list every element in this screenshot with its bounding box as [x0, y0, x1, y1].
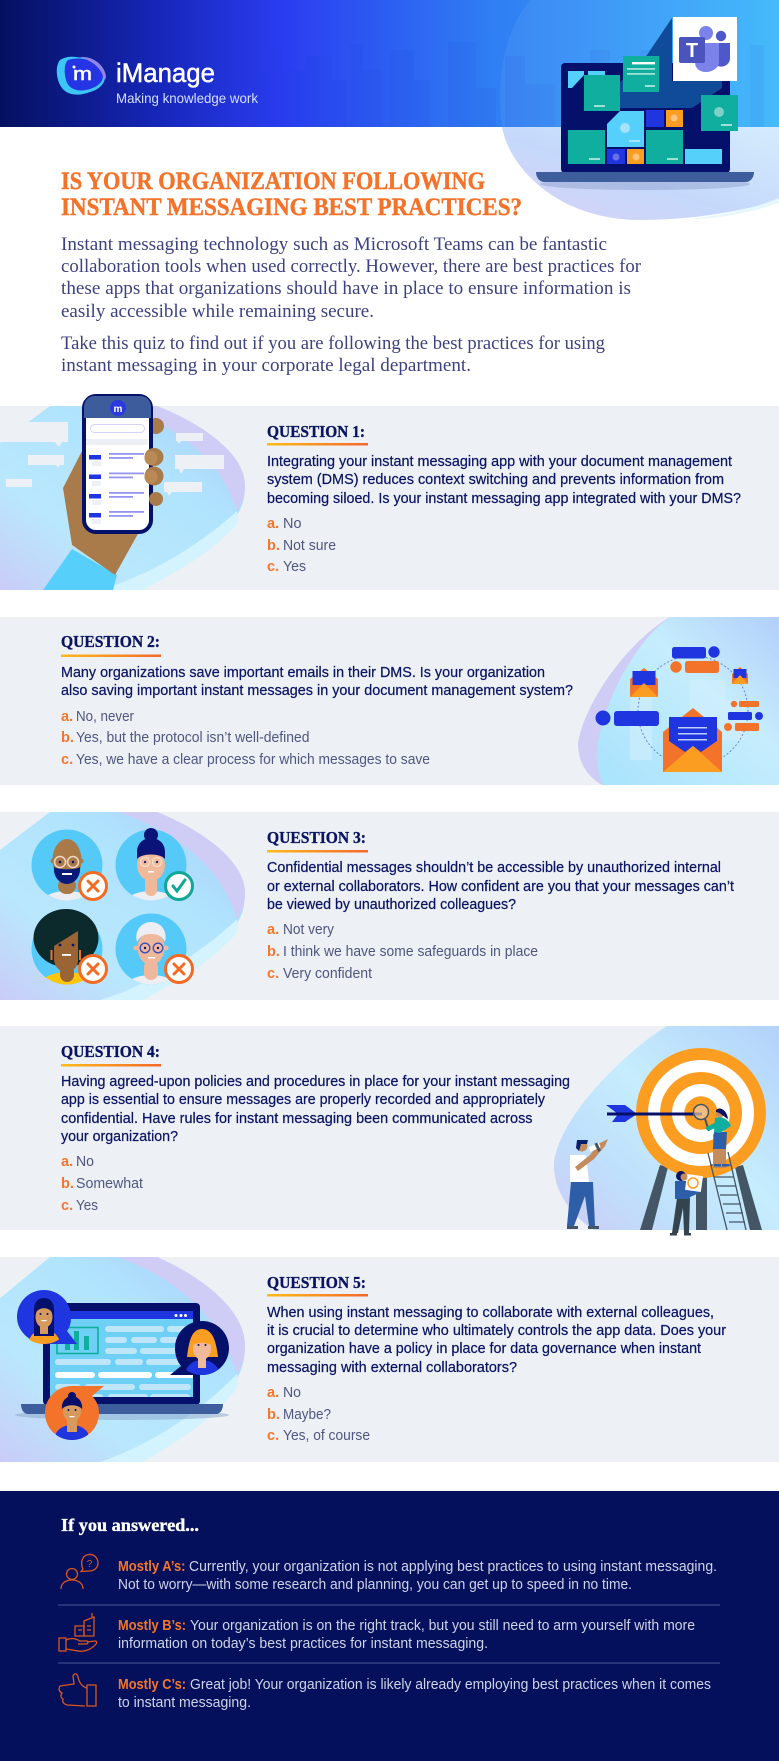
- intro text: [61, 234, 642, 376]
- answers: Yes, of course: [283, 1428, 370, 1444]
- answers: b.: [267, 1407, 280, 1423]
- answers: Yes, but the protocol isn’t well-defined: [76, 730, 310, 746]
- intro text: Take this quiz to find out if you are following the best practices for using: [61, 333, 605, 354]
- answers: a.: [267, 922, 279, 938]
- question text: [267, 1305, 726, 1376]
- answers: b.: [61, 1176, 74, 1192]
- question text: [61, 665, 573, 699]
- question text: Integrating your instant messaging app with your document management: [267, 454, 732, 470]
- woman with document: [670, 1171, 703, 1236]
- answers: No: [283, 516, 302, 532]
- result B: [118, 1618, 695, 1652]
- intro text: collaboration tools when used correctly. However, there are best practices for: [61, 256, 642, 277]
- question text: [267, 454, 741, 507]
- answers: b.: [61, 730, 74, 746]
- arrow: [606, 1105, 702, 1122]
- answers: c.: [61, 1198, 73, 1214]
- city skyline: [250, 42, 764, 127]
- icon: hand holding phone: m: [114, 404, 123, 415]
- wordmark: iManage: [116, 58, 215, 88]
- title: IS YOUR ORGANIZATION FOLLOWING: [61, 168, 485, 195]
- panel: question 1: [0, 396, 779, 590]
- avatars: [32, 828, 194, 984]
- avatar: woman with afro: [32, 909, 102, 984]
- answers: c.: [267, 559, 279, 575]
- answers: [61, 709, 430, 768]
- answers: No, never: [76, 709, 134, 725]
- header banner: [0, 0, 779, 127]
- answers: c.: [267, 966, 279, 982]
- icon: laptop with tiles and Teams logo: [536, 17, 754, 190]
- avatar: man on orange bubble: [45, 1386, 104, 1442]
- result B: Mostly B’s:: [118, 1618, 186, 1634]
- panel: question 3: [0, 812, 779, 1008]
- answers: Very confident: [283, 966, 372, 982]
- panel: question 5: [0, 1257, 779, 1462]
- chat bubbles: [0, 422, 224, 496]
- heading: QUESTION 4:: [61, 1042, 160, 1061]
- answers: a.: [61, 1154, 73, 1170]
- icon: person with question bubble: ?: [87, 1559, 93, 1570]
- blob: [578, 617, 779, 785]
- heading: QUESTION 1:: [267, 422, 365, 441]
- logo: iManage: [57, 57, 259, 106]
- header blob behind laptop: [500, 0, 779, 220]
- answers: No: [283, 1385, 301, 1401]
- result C: [118, 1677, 711, 1711]
- answers: b.: [267, 538, 280, 554]
- title: INSTANT MESSAGING BEST PRACTICES?: [61, 194, 522, 221]
- result A: [118, 1559, 717, 1593]
- question text: it is crucial to determine who ultimately controls the app data. Does your: [267, 1323, 726, 1339]
- question text: system (DMS) reduces context switching and prevents information from: [267, 472, 724, 488]
- answers: Not sure: [283, 538, 336, 554]
- avatar: older man: [116, 914, 186, 984]
- man with megaphone: [567, 1139, 608, 1229]
- intro text: instant messaging in your corporate legal department.: [61, 355, 471, 376]
- logo mark: [57, 57, 106, 95]
- icon: Microsoft Teams logo: [673, 17, 737, 81]
- result C: Great job! Your organization is likely already employing best practices when it comes: [190, 1677, 711, 1693]
- icon: Microsoft Teams logo: T: [686, 40, 698, 62]
- question text: be viewed by unauthorized colleagues?: [267, 897, 516, 913]
- answers: b.: [267, 944, 280, 960]
- result B: information on today’s best practices for instant messaging.: [118, 1636, 488, 1652]
- answers: Yes, we have a clear process for which messages to save: [76, 752, 430, 768]
- tagline: Making knowledge work: [116, 90, 259, 106]
- result C: Mostly C’s:: [118, 1677, 186, 1693]
- answers: Yes: [76, 1198, 98, 1214]
- question text: Having agreed-upon policies and procedures in place for your instant messaging: [61, 1074, 570, 1090]
- icon: hand holding phone: [43, 396, 164, 590]
- badges: [80, 872, 192, 982]
- question text: [61, 1074, 570, 1145]
- intro text: these apps that organizations should have in place to ensure information is: [61, 278, 631, 299]
- title: [61, 168, 522, 221]
- question text: app is essential to ensure messages are properly recorded and appropriately: [61, 1092, 546, 1108]
- ladder: [708, 1152, 746, 1230]
- answers: No: [76, 1154, 94, 1170]
- avatar: woman with bun: [116, 828, 186, 900]
- question text: Many organizations save important emails in their DMS. Is your organization: [61, 665, 545, 681]
- woman on ladder: [705, 1108, 731, 1168]
- icon: hand holding buildings: [59, 1613, 97, 1651]
- question text: becoming siloed. Is your instant messaging app integrated with your DMS?: [267, 491, 741, 507]
- icon: laptop with video call avatars: [15, 1290, 229, 1442]
- question text: your organization?: [61, 1129, 178, 1145]
- icon: envelopes and messages network: [596, 646, 763, 772]
- panel: question 2: [0, 617, 779, 785]
- results heading: If you answered...: [61, 1515, 199, 1535]
- intro text: easily accessible while remaining secure.: [61, 301, 374, 322]
- avatar: bearded man: [32, 830, 102, 900]
- answers: Not very: [283, 922, 335, 938]
- icon: person with question bubble: [61, 1554, 98, 1589]
- answers: I think we have some safeguards in place: [283, 944, 538, 960]
- panel: question 4: [0, 1026, 779, 1236]
- question text: organization have a policy in place for data governance when instant: [267, 1341, 701, 1357]
- result A: Mostly A’s:: [118, 1559, 186, 1575]
- result A: Not to worry—with some research and planning, you can get up to speed in no time.: [118, 1577, 632, 1593]
- result C: to instant messaging.: [118, 1695, 251, 1711]
- answers: a.: [267, 1385, 279, 1401]
- icon: target with arrow and people: [567, 1048, 766, 1236]
- question text: [267, 860, 734, 913]
- result B: Your organization is on the right track, but you still need to arm yourself with more: [190, 1618, 695, 1634]
- panel: results: [0, 1491, 779, 1761]
- intro text: Instant messaging technology such as Microsoft Teams can be fantastic: [61, 234, 607, 255]
- heading: QUESTION 2:: [61, 632, 160, 651]
- question text: also saving important instant messages in your document management system?: [61, 683, 573, 699]
- answers: [61, 1154, 143, 1214]
- result A: Currently, your organization is not applying best practices to using instant messaging.: [189, 1559, 717, 1575]
- icon: thumbs up: [59, 1674, 96, 1706]
- question text: messaging with external collaborators?: [267, 1360, 517, 1376]
- answers: a.: [61, 709, 73, 725]
- answers: c.: [61, 752, 73, 768]
- blob: [554, 1026, 779, 1230]
- answers: a.: [267, 516, 279, 532]
- answers: [267, 516, 336, 575]
- question text: When using instant messaging to collaborate with external colleagues,: [267, 1305, 714, 1321]
- answers: Yes: [283, 559, 306, 575]
- answers: [267, 922, 538, 982]
- question text: or external collaborators. How confident are you that your messages can’t: [267, 879, 734, 895]
- answers: Maybe?: [283, 1407, 331, 1423]
- avatar: woman on blue bubble: [17, 1290, 77, 1344]
- avatar: blonde woman on navy bubble: [170, 1321, 229, 1380]
- answers: [267, 1385, 370, 1444]
- logo mark: m: [73, 64, 92, 84]
- question text: Confidential messages shouldn’t be accessible by unauthorized internal: [267, 860, 721, 876]
- heading: QUESTION 5:: [267, 1273, 366, 1292]
- question text: confidential. Have rules for instant messaging been communicated across: [61, 1111, 532, 1127]
- answers: c.: [267, 1428, 279, 1444]
- heading: QUESTION 3:: [267, 828, 366, 847]
- answers: Somewhat: [76, 1176, 143, 1192]
